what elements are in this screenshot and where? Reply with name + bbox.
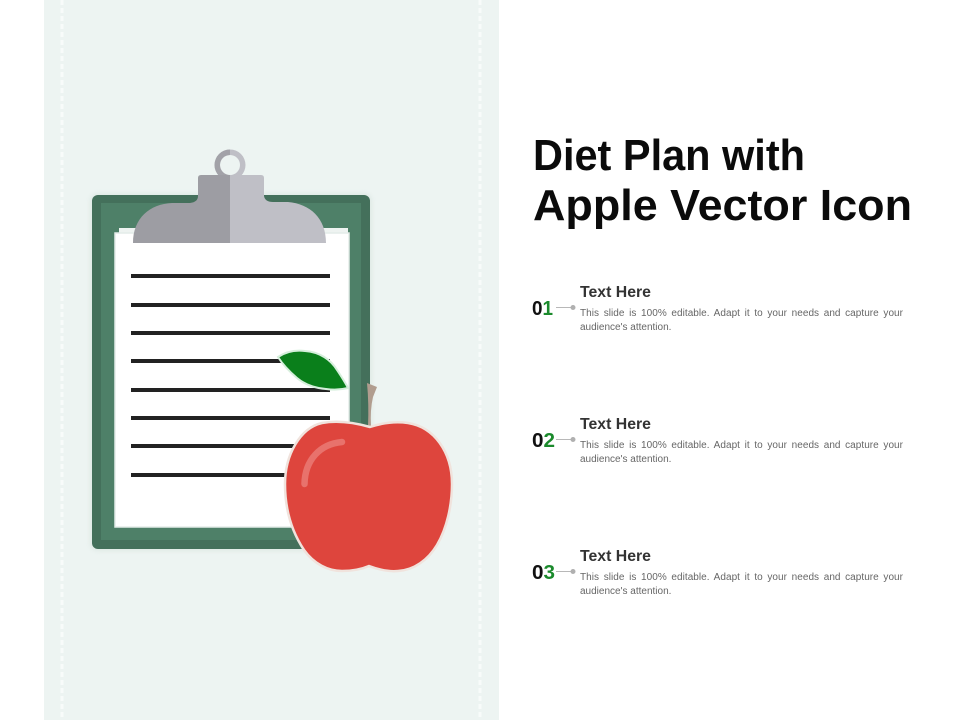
number 01: 01 [532,298,553,320]
description: This slide is 100% editable. Adapt it to your needs and capture your [580,572,904,583]
connector [556,305,576,310]
list item 01 [532,284,904,333]
title: Apple Vector Icon [533,181,912,230]
connector [556,437,576,442]
clipboard paper [115,228,349,527]
apple stem [367,383,377,426]
apple highlight [304,442,342,484]
clipboard clip [133,150,326,243]
icon: apple [278,351,452,571]
connector [556,569,576,574]
description [580,308,904,333]
list item 02 [532,416,904,465]
description: audience's attention. [580,322,671,333]
description: audience's attention. [580,586,671,597]
panel: pale green background [44,0,499,720]
number 03: 03 [532,562,555,584]
heading: Text Here [580,284,651,301]
apple body [285,422,452,571]
title: Diet Plan with [533,131,805,180]
clipboard text lines [131,274,330,477]
icon: clipboard [90,150,372,551]
list item 03 [532,548,904,597]
description: audience's attention. [580,454,671,465]
description [580,440,904,465]
title [533,131,912,230]
description: This slide is 100% editable. Adapt it to your needs and capture your [580,440,904,451]
description: This slide is 100% editable. Adapt it to your needs and capture your [580,308,904,319]
description [580,572,904,597]
clipboard board [92,195,370,549]
apple leaf [278,351,348,390]
heading: Text Here [580,548,651,565]
number 02: 02 [532,430,555,452]
heading: Text Here [580,416,651,433]
